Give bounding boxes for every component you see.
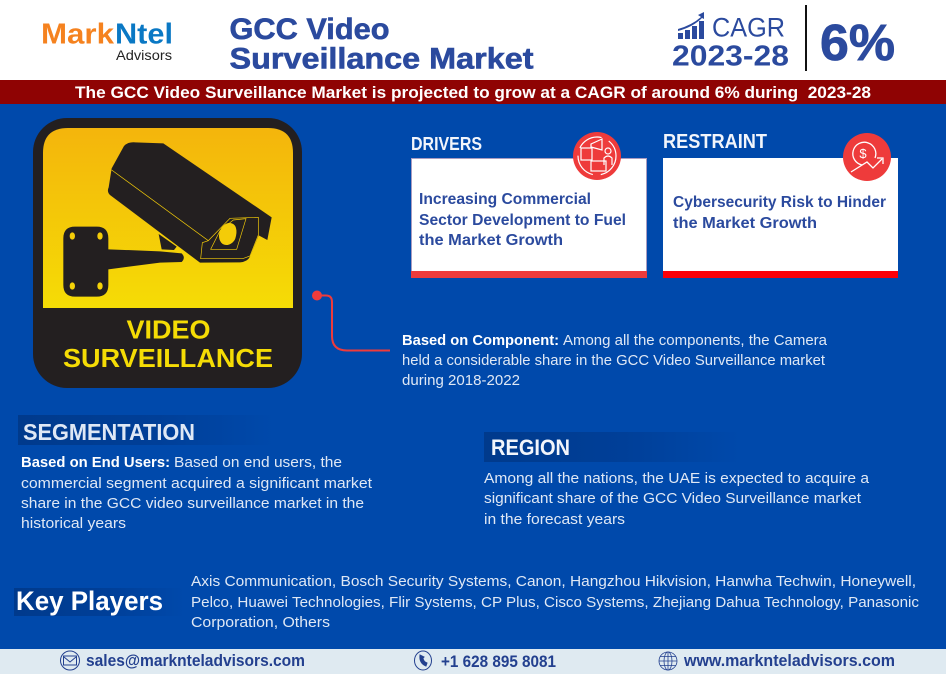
title: Surveillance Market — [230, 42, 534, 76]
text: based on component — [402, 332, 828, 389]
drivers text: Sector Development to Fuel — [419, 212, 626, 229]
text: based on component: Among all the components, the Camera — [563, 332, 828, 349]
CAGR value: 6% — [820, 14, 895, 71]
segmentation text: Based on End Users: — [21, 454, 170, 471]
text: based on component: during 2018-2022 — [402, 372, 520, 389]
sign text: VIDEO — [126, 316, 210, 344]
region text: in the forecast years — [484, 511, 625, 528]
drivers text: Increasing Commercial — [419, 191, 591, 208]
panel: restraint — [663, 131, 898, 278]
restraint text: the Market Growth — [673, 215, 817, 232]
icon: phone — [414, 651, 432, 670]
icon: restraint badge: $ — [859, 146, 867, 161]
region text: Among all the nations, the UAE is expected to acquire a — [484, 470, 870, 487]
panel: drivers — [411, 132, 647, 278]
region text: significant share of the GCC Video Surveillance market — [484, 490, 862, 507]
drivers text — [419, 191, 626, 249]
key players list — [191, 573, 919, 631]
panel: key players — [14, 573, 919, 631]
panel: region — [484, 432, 870, 528]
segmentation text: historical years — [21, 515, 126, 532]
panel: key players: Key Players — [16, 586, 163, 616]
panel: segmentation: SEGMENTATION — [23, 419, 195, 445]
banner: CAGR statement: The GCC Video Surveillance Market is projected to grow at a CAGR of around 6% during 2023-28 — [75, 83, 871, 102]
header band — [0, 0, 946, 80]
email address: sales@marknteladvisors.com — [86, 652, 305, 670]
phone number: +1 628 895 8081 — [441, 653, 556, 671]
segmentation text: commercial segment acquired a significant market — [21, 475, 373, 492]
sign text: SURVEILLANCE — [63, 345, 273, 373]
icon: growth chart — [678, 12, 704, 39]
CAGR label: CAGR — [712, 12, 785, 42]
logo: MarkNtel Advisors: Ntel — [115, 18, 173, 50]
key players list: Corporation, Others — [191, 614, 330, 631]
panel: restraint: RESTRAINT — [663, 131, 767, 153]
restraint text: Cybersecurity Risk to Hinder — [673, 194, 886, 211]
connector line — [312, 290, 390, 350]
text: based on component: Based on Component: — [402, 332, 559, 349]
key players list: Axis Communication, Bosch Security Systems, Canon, Hangzhou Hikvision, Hanwha Techwin, Honeywell, — [191, 573, 916, 590]
segmentation text: share in the GCC video surveillance market in the — [21, 495, 364, 512]
footer: contact bar — [0, 649, 946, 674]
banner: CAGR statement — [0, 80, 946, 104]
panel: region: REGION — [491, 435, 570, 460]
title — [230, 13, 534, 76]
logo: MarkNtel Advisors — [41, 18, 173, 63]
drivers text: the Market Growth — [419, 232, 563, 249]
logo: MarkNtel Advisors: Mark — [41, 18, 115, 50]
sign text — [63, 316, 273, 373]
text: based on component: held a considerable share in the GCC Video Surveillance market — [402, 352, 826, 369]
key players list: Pelco, Huawei Technologies, Flir Systems, CP Plus, Cisco Systems, Zhejiang Dahua Technology, Panasonic — [191, 594, 919, 611]
segmentation text: Based on end users, the — [174, 454, 342, 471]
website: www.marknteladvisors.com — [683, 652, 895, 670]
region text — [484, 470, 870, 528]
panel: video surveillance sign — [33, 118, 302, 388]
icon: globe — [659, 652, 677, 670]
restraint text — [673, 194, 886, 232]
icon: drivers badge — [573, 132, 621, 180]
icon: security camera — [63, 142, 272, 297]
icon: restraint badge — [843, 133, 891, 181]
panel: drivers: DRIVERS — [411, 134, 482, 154]
CAGR label: 2023-28 — [672, 40, 789, 72]
segmentation text — [21, 454, 373, 532]
title: GCC Video — [230, 13, 390, 46]
panel: segmentation — [18, 415, 373, 532]
icon: email — [60, 651, 80, 670]
CAGR label — [672, 12, 789, 72]
logo: MarkNtel Advisors: Advisors — [116, 47, 172, 63]
